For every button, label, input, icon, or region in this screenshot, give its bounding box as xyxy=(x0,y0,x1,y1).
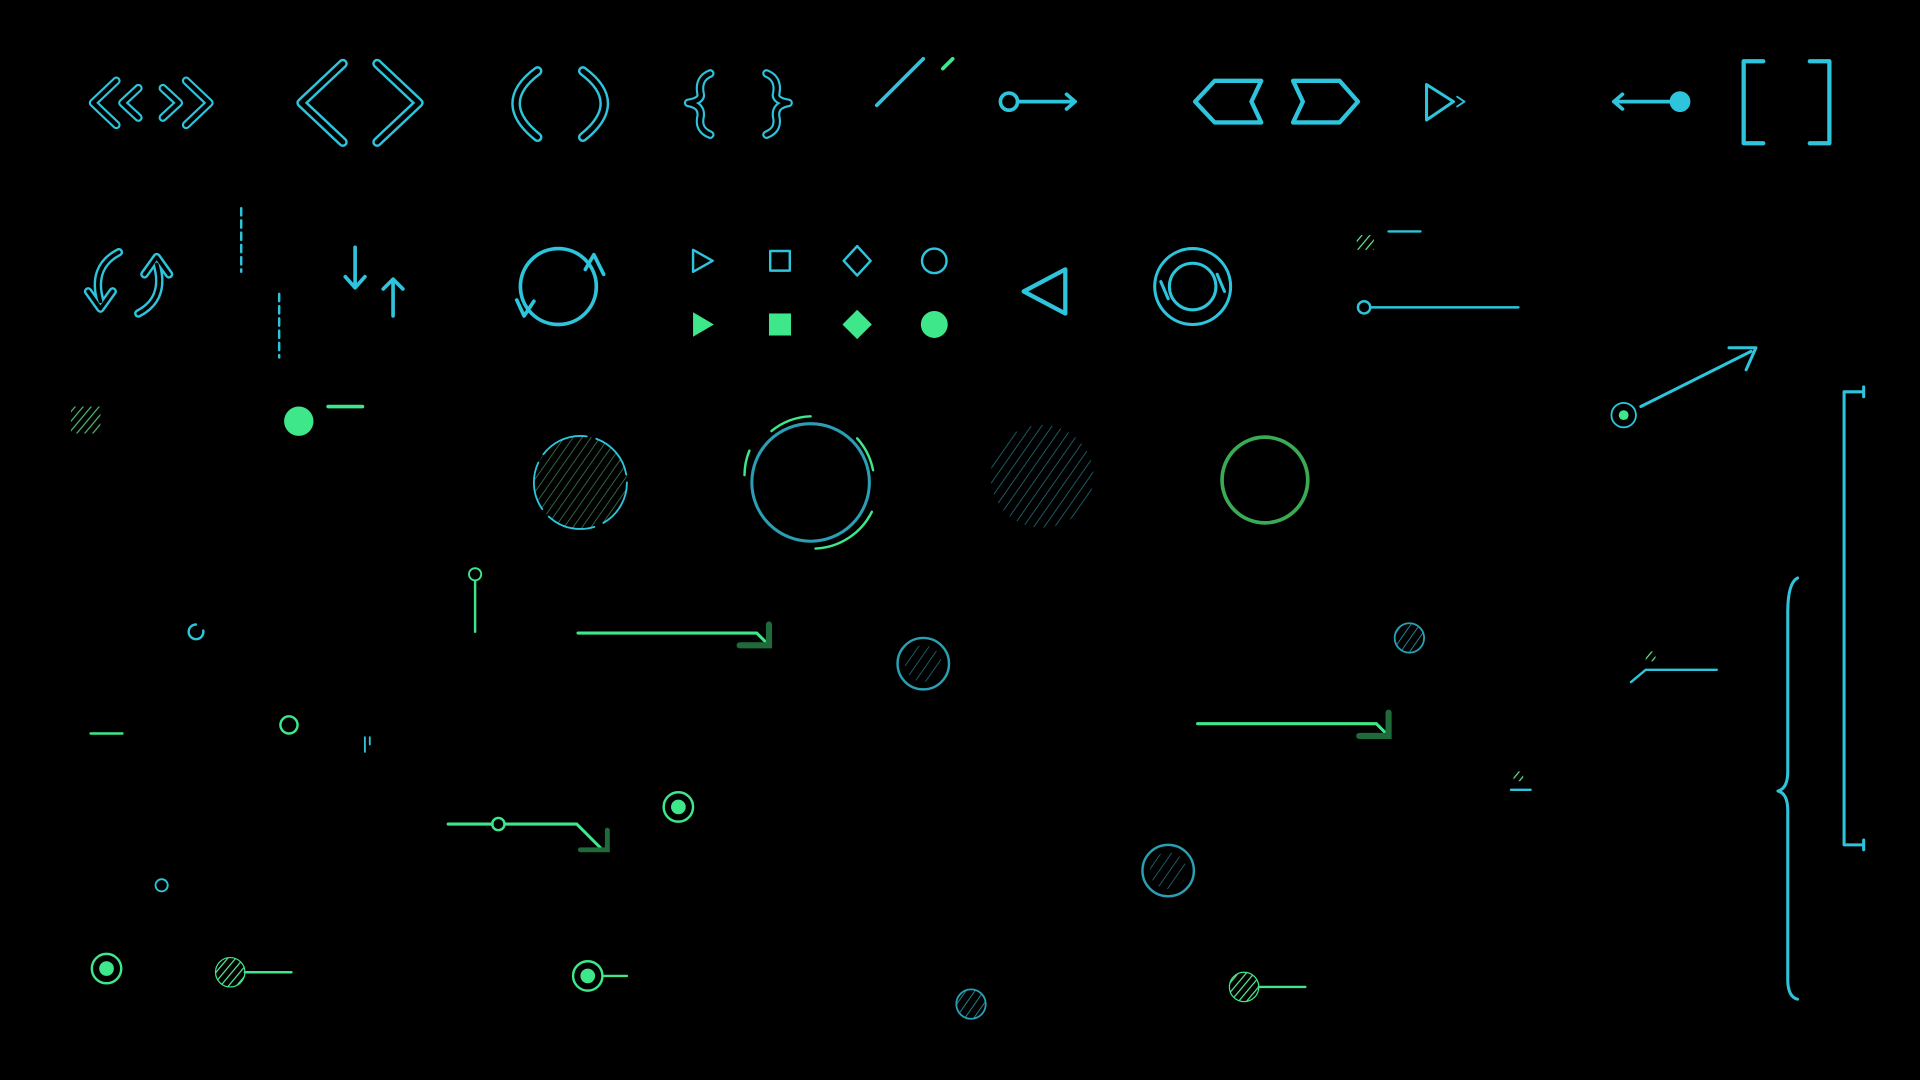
icon: block arrows xyxy=(1195,81,1358,122)
green ring xyxy=(1222,437,1308,523)
icon: arrow to dot xyxy=(1614,93,1689,110)
shapes: outline xyxy=(693,246,947,276)
icon: play triangle xyxy=(1427,84,1464,120)
right brackets xyxy=(1778,387,1864,999)
icon: refresh arrows xyxy=(88,252,169,313)
icon: curly braces xyxy=(688,73,789,135)
diagonal pointer xyxy=(1611,348,1756,427)
scattered small elements xyxy=(91,568,1717,1019)
icon: square brackets xyxy=(1744,61,1829,143)
icon: angle brackets xyxy=(301,64,419,142)
circle hatched dark xyxy=(991,425,1093,528)
small hatched top-left xyxy=(71,407,100,433)
icon: rotate circle xyxy=(517,249,604,324)
icon: up down arrows xyxy=(345,247,403,316)
icon: parentheses xyxy=(516,71,604,137)
shapes: filled green xyxy=(693,310,948,339)
icon: slash xyxy=(877,59,953,105)
icon: dashed lines xyxy=(241,208,279,358)
green dot with line xyxy=(284,407,362,436)
icon: ring refresh xyxy=(1155,249,1231,324)
line with node top right xyxy=(1357,231,1518,313)
circle with green arcs xyxy=(744,416,873,549)
icon: double chevrons xyxy=(93,81,209,125)
icon: circle arrow xyxy=(1000,93,1075,110)
circle hatched dashed xyxy=(534,436,627,529)
icon: triangle left xyxy=(1024,269,1065,313)
